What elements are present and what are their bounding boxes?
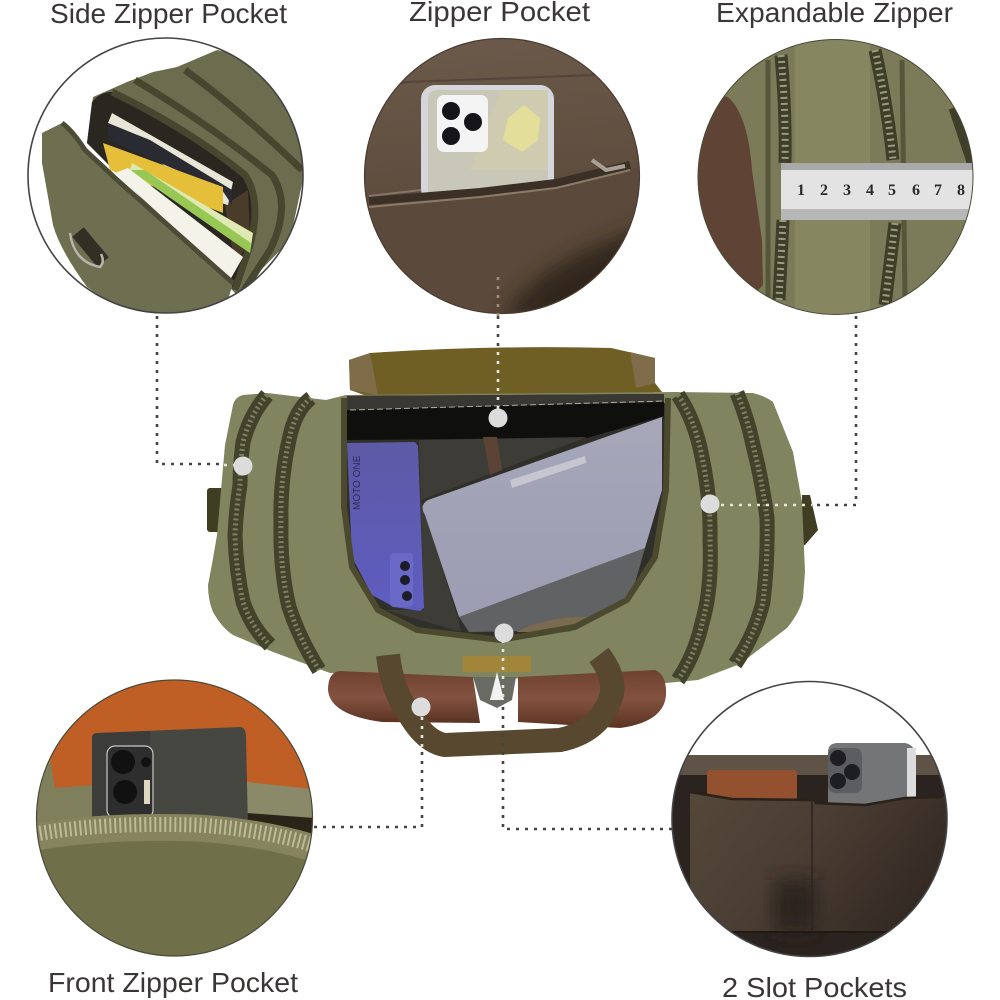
ruler: 5	[888, 182, 896, 199]
grey lower tablet	[459, 548, 645, 632]
bag upper body	[87, 50, 312, 295]
side zippers	[235, 393, 767, 680]
interior	[87, 92, 255, 290]
dark gap	[248, 813, 312, 834]
ruler: 7	[934, 182, 942, 199]
main zip trim	[344, 398, 668, 640]
fabric pocket	[40, 840, 306, 956]
interior black back	[347, 394, 664, 440]
fleece	[516, 617, 595, 632]
panel: side zipper pocket	[42, 50, 302, 312]
side strap left	[207, 488, 225, 532]
olive fabric behind	[37, 759, 92, 823]
panel: open duffel bag	[207, 347, 818, 745]
panel: expandable zipper	[695, 35, 980, 320]
zippers	[112, 70, 302, 292]
d-ring	[70, 232, 103, 267]
pockets	[690, 792, 960, 932]
brass tag	[463, 656, 531, 672]
side strap right	[802, 495, 818, 545]
panel: front zipper pocket	[37, 680, 312, 956]
dotted connector lines	[157, 316, 856, 829]
panel: zipper pocket	[360, 35, 650, 320]
circle outline: zipper pocket	[364, 38, 640, 314]
flap	[349, 347, 662, 404]
leather handle wraps	[328, 671, 480, 723]
heading: Front Zipper Pocket: Front Zipper Pocket	[48, 967, 298, 998]
dotted connector overlays on bag	[224, 352, 812, 752]
connector dots	[234, 408, 720, 716]
tablet label	[510, 456, 586, 488]
tablet	[423, 417, 662, 617]
phone	[421, 85, 554, 203]
circle outline: side pocket	[28, 38, 303, 313]
ruler: 3	[843, 182, 851, 199]
ruler: 4	[866, 182, 874, 199]
zippers	[779, 50, 972, 305]
books	[108, 113, 233, 205]
seam shadows	[768, 60, 905, 300]
zip pull	[592, 160, 625, 170]
zipper	[30, 827, 320, 850]
pocket lower fabric	[407, 187, 554, 313]
circle outline: slot pockets	[672, 682, 947, 956]
bag body	[208, 392, 805, 683]
front flap	[42, 123, 233, 316]
ruler	[781, 163, 976, 220]
circle outline: front pocket	[36, 680, 312, 956]
leather side	[698, 96, 763, 290]
interior base	[344, 403, 668, 640]
wallet	[707, 770, 797, 800]
phone	[92, 727, 248, 830]
ruler: 8	[957, 182, 965, 199]
panel: 2 slot pockets	[672, 743, 946, 956]
phone	[828, 743, 916, 810]
denim fabric	[386, 437, 587, 632]
ruler: 2	[820, 182, 828, 199]
zipper	[369, 165, 630, 201]
ruler: 1	[797, 182, 805, 199]
ruler: 6	[912, 182, 920, 199]
phone	[347, 442, 424, 611]
zip pull	[473, 677, 516, 708]
circle outline: expandable zipper	[698, 40, 973, 314]
phone: MOTO ONE	[352, 455, 363, 510]
handle straps	[388, 655, 612, 745]
